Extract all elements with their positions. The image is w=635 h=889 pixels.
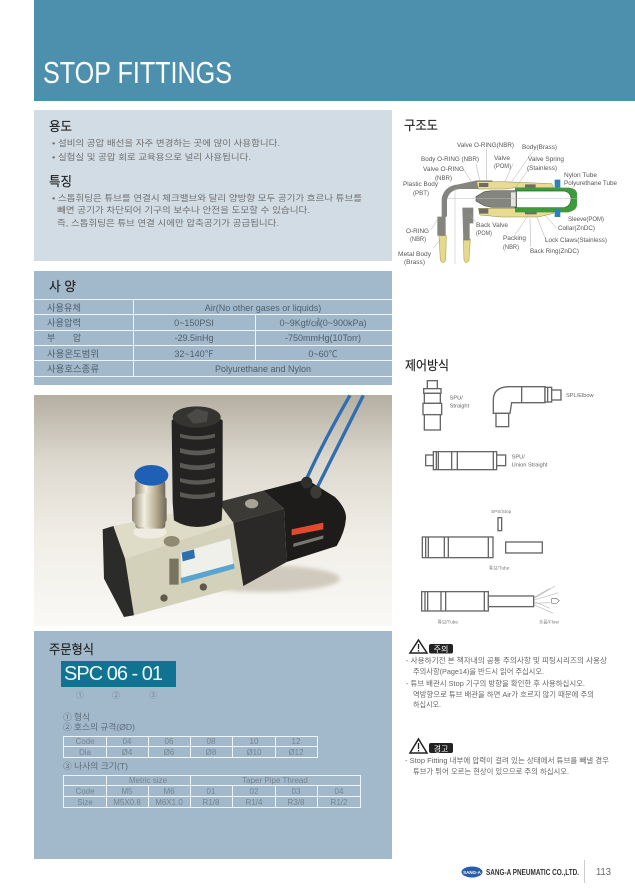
label: flow: 흐름/Flow bbox=[539, 619, 559, 624]
panel: product photo bbox=[34, 395, 392, 626]
warning text bbox=[405, 755, 609, 776]
shadow bbox=[187, 565, 340, 592]
label: union straight: Union Straight bbox=[512, 462, 548, 468]
specification table text bbox=[47, 303, 367, 374]
specification table text: 부 압 bbox=[47, 332, 81, 343]
table: hose size: Ø12 bbox=[288, 748, 304, 757]
brass body bbox=[477, 182, 554, 217]
diagram labels: Valve bbox=[494, 156, 511, 162]
table: thread size: 01 bbox=[207, 787, 216, 796]
title: STOP FITTINGS bbox=[43, 55, 232, 90]
code position markers: ① bbox=[76, 691, 84, 700]
text: item 1: ① 형식 bbox=[63, 712, 90, 722]
valve body bbox=[103, 504, 243, 617]
heading: specifications: 사 양 bbox=[49, 279, 76, 294]
fitting: union straight bbox=[426, 452, 506, 470]
table: thread size: R1/2 bbox=[331, 798, 348, 807]
heading: features: 특징 bbox=[49, 174, 72, 189]
diagram labels: Packing bbox=[503, 236, 526, 242]
diagram labels: Sleeve(POM) bbox=[568, 217, 604, 223]
table: thread size: Metric size bbox=[129, 776, 168, 785]
panel: ordering format bbox=[34, 631, 392, 859]
text block: features bbox=[52, 193, 362, 228]
text block: usage bullets: • 설비의 공압 배선을 자주 변경하는 곳에 많이 사용합니다. bbox=[52, 138, 280, 148]
table: thread size: 02 bbox=[250, 787, 259, 796]
diagram labels: Metal Body bbox=[398, 252, 431, 258]
blue tubes bbox=[307, 395, 363, 489]
specification table text: 0~9Kgf/㎠(0~900kPa) bbox=[279, 318, 367, 328]
green sleeve and tube bbox=[515, 188, 577, 212]
diagram labels: (POM) bbox=[476, 231, 492, 237]
table: thread size: 03 bbox=[292, 787, 301, 796]
specification table text: 0~150PSI bbox=[174, 318, 214, 328]
metal body legs bbox=[439, 236, 470, 262]
table: hose size bbox=[64, 736, 318, 758]
black manifold block bbox=[218, 491, 287, 586]
label: tube: 튜브/Tube bbox=[489, 565, 510, 571]
table: thread size: M5 bbox=[121, 787, 133, 796]
heading: control method: 제어방식 bbox=[405, 358, 449, 373]
icon: warning triangle bbox=[410, 739, 427, 753]
blue release cap bbox=[134, 465, 168, 486]
caution text bbox=[406, 655, 607, 709]
table: thread size: Taper Pipe Thread bbox=[242, 776, 308, 785]
diagram labels: Polyurethane Tube bbox=[564, 181, 618, 187]
diagram labels: (Stainless) bbox=[527, 166, 557, 172]
caution text: - 사용하기전 본 책자내의 공통 주의사항 및 피팅시리즈의 사용상 bbox=[406, 655, 607, 665]
header banner bbox=[34, 0, 635, 101]
table: hose size: 08 bbox=[207, 737, 216, 746]
text block: usage bullets: • 실험실 및 공압 회로 교육용으로 널리 사용됩니다. bbox=[52, 152, 251, 162]
red label on coil bbox=[292, 523, 323, 547]
diagram labels: (NBR) bbox=[503, 245, 519, 251]
company logo bbox=[462, 866, 482, 878]
fitting: straight bbox=[423, 381, 442, 430]
stop pin bbox=[498, 518, 502, 531]
diagram labels: (POM) bbox=[494, 164, 511, 170]
black silencer bbox=[172, 406, 223, 527]
diagram labels: O-RING bbox=[406, 229, 429, 235]
diagram labels: Back Valve bbox=[476, 223, 509, 229]
specification table text: 사용압력 bbox=[47, 317, 81, 328]
label: stop: SPS/Stop bbox=[491, 509, 512, 514]
heading: ordering: 주문형식 bbox=[49, 642, 94, 657]
diagram labels: Body(Brass) bbox=[522, 145, 557, 151]
warning badge bbox=[429, 743, 453, 754]
caution badge bbox=[429, 644, 453, 654]
company logo: SANG-A bbox=[463, 870, 482, 875]
specification table text: 0~60℃ bbox=[308, 349, 338, 359]
diagram labels: (NBR) bbox=[435, 176, 452, 182]
code position markers: ③ bbox=[149, 691, 157, 700]
diagram labels: Plastic Body bbox=[403, 182, 438, 188]
table: thread size: R1/8 bbox=[203, 798, 220, 807]
table: hose size: 06 bbox=[165, 737, 174, 746]
page number: 113 bbox=[596, 867, 611, 878]
code position markers bbox=[76, 691, 157, 700]
footer bbox=[462, 860, 611, 883]
table: thread size: R1/4 bbox=[246, 798, 263, 807]
label: union straight bbox=[512, 454, 548, 468]
blue collar bbox=[555, 180, 560, 217]
diagram labels: Nylon Tube bbox=[564, 173, 598, 179]
diagram labels: (Brass) bbox=[404, 260, 425, 266]
text block: features: • 스톱휘팅은 튜브를 연결시 체크밸브와 달리 양방향 모두 공기가 흐르나 튜브를 bbox=[52, 193, 362, 203]
specification table text: -29.5inHg bbox=[174, 333, 214, 343]
label: union straight: SPU/ bbox=[512, 454, 525, 460]
chart: fitting cross-section diagram bbox=[431, 148, 579, 264]
table: thread size: M6 bbox=[163, 787, 175, 796]
label: tube bottom: 튜브/Tube bbox=[438, 619, 458, 625]
table: thread size: Code bbox=[75, 787, 95, 796]
text block: features: 즉, 스톱휘팅은 튜브 연결 시에만 압축공기가 공급됩니다. bbox=[57, 218, 279, 228]
warning block bbox=[405, 739, 609, 776]
caution text: - 튜브 배관시 Stop 기구의 방향을 확인한 후 사용하십시오. bbox=[406, 678, 585, 688]
text block: features: 빼면 공기가 차단되어 기구의 보수나 안전을 도모할 수 있습니다. bbox=[57, 205, 310, 215]
push-in fitting bbox=[132, 465, 168, 539]
table: hose size: Ø4 bbox=[122, 748, 133, 757]
fitting with separate tube bbox=[422, 537, 542, 558]
table: thread size: M5X0.8 bbox=[113, 798, 141, 807]
table: hose size: 04 bbox=[123, 737, 132, 746]
caution text: 주의사항(Page14)을 반드시 읽어 주십시오. bbox=[413, 666, 544, 676]
label: straight: SPU/ bbox=[450, 396, 463, 402]
plastic elbow bbox=[437, 180, 492, 240]
label: elbow: SPL/Elbow bbox=[566, 393, 595, 399]
label: straight: Straight bbox=[450, 404, 470, 410]
diagram labels: Lock Claws(Stainless) bbox=[545, 238, 607, 244]
leader lines bbox=[431, 148, 557, 248]
warning text: 튜브가 튀어 오르는 현상이 있으므로 주의 하십시오. bbox=[413, 766, 569, 776]
diagram labels: Back Ring(ZnDC) bbox=[530, 249, 579, 255]
icon: caution triangle bbox=[410, 640, 427, 653]
panel: usage and features bbox=[34, 110, 392, 261]
coil bbox=[263, 479, 346, 562]
diagram labels: Valve Spring bbox=[528, 157, 564, 163]
table: thread size: 04 bbox=[335, 787, 344, 796]
specification table text: 사용유체 bbox=[47, 303, 81, 313]
caution block bbox=[406, 640, 607, 709]
fitting: elbow bbox=[493, 387, 561, 427]
company name: SANG-A PNEUMATIC CO.,LTD. bbox=[486, 868, 579, 877]
text: item 2: ② 호스의 규격(ØD) bbox=[63, 722, 135, 732]
diagram labels: Valve O-RING(NBR) bbox=[457, 143, 514, 149]
specification table text: -750mmHg(10Torr) bbox=[285, 333, 361, 343]
warning badge: 경고 bbox=[434, 744, 448, 754]
diagram labels: (NBR) bbox=[410, 237, 426, 243]
table: hose size: Code bbox=[75, 737, 95, 746]
warning text: - Stop Fitting 내부에 압력이 걸려 있는 상태에서 튜브를 빼낼 경우 bbox=[405, 755, 609, 765]
table: hose size: Ø6 bbox=[164, 748, 175, 757]
panel: specifications bbox=[34, 271, 392, 385]
diagram labels: (PBT) bbox=[413, 191, 429, 197]
table: thread size: Size bbox=[77, 798, 93, 807]
specification table text: 사용호스종류 bbox=[47, 364, 99, 374]
solenoid valve illustration bbox=[103, 395, 363, 617]
pilot button bbox=[245, 499, 258, 508]
specification table text: 32~140℉ bbox=[174, 349, 214, 359]
heading: structure: 구조도 bbox=[404, 118, 438, 133]
table: thread size bbox=[64, 775, 360, 808]
specification table text: 사용온도범위 bbox=[47, 349, 99, 359]
product label bbox=[181, 539, 235, 584]
table: thread size: M6X1.0 bbox=[155, 798, 183, 807]
table: hose size: Ø8 bbox=[206, 748, 217, 757]
text block: usage bullets bbox=[52, 138, 280, 162]
caution text: 역방향으로 튜브 배관을 하면 Air가 흐르지 않기 때문에 주의 bbox=[413, 689, 594, 699]
text: item 3: ③ 나사의 크기(T) bbox=[63, 761, 128, 771]
specification table text: Polyurethane and Nylon bbox=[215, 364, 311, 374]
heading: usage: 용도 bbox=[49, 119, 72, 134]
tube ports bbox=[301, 477, 322, 499]
table: hose size: 10 bbox=[250, 737, 259, 746]
label: straight bbox=[450, 396, 470, 410]
diagram labels: Body O-RING (NBR) bbox=[421, 157, 479, 163]
diagram labels bbox=[398, 143, 618, 266]
diagram labels: Collar(ZnDC) bbox=[558, 226, 595, 232]
code position markers: ② bbox=[112, 691, 120, 700]
back valve bbox=[476, 191, 517, 207]
specification table text: Air(No other gases or liquids) bbox=[205, 303, 321, 313]
icon group: fitting line drawings bbox=[422, 381, 595, 625]
caution text: 하십시오. bbox=[413, 699, 441, 709]
table: hose size: 12 bbox=[292, 737, 301, 746]
center lines bbox=[448, 188, 579, 264]
table: hose size: Dia bbox=[79, 748, 92, 757]
model code box: SPC 06 - 01 bbox=[64, 663, 163, 685]
table: thread size: R3/8 bbox=[288, 798, 305, 807]
table: hose size: Ø10 bbox=[246, 748, 262, 757]
fitting with tube and flow bbox=[422, 586, 559, 613]
caution badge: 주의 bbox=[434, 644, 448, 654]
diagram labels: Valve O-RING bbox=[423, 167, 464, 173]
